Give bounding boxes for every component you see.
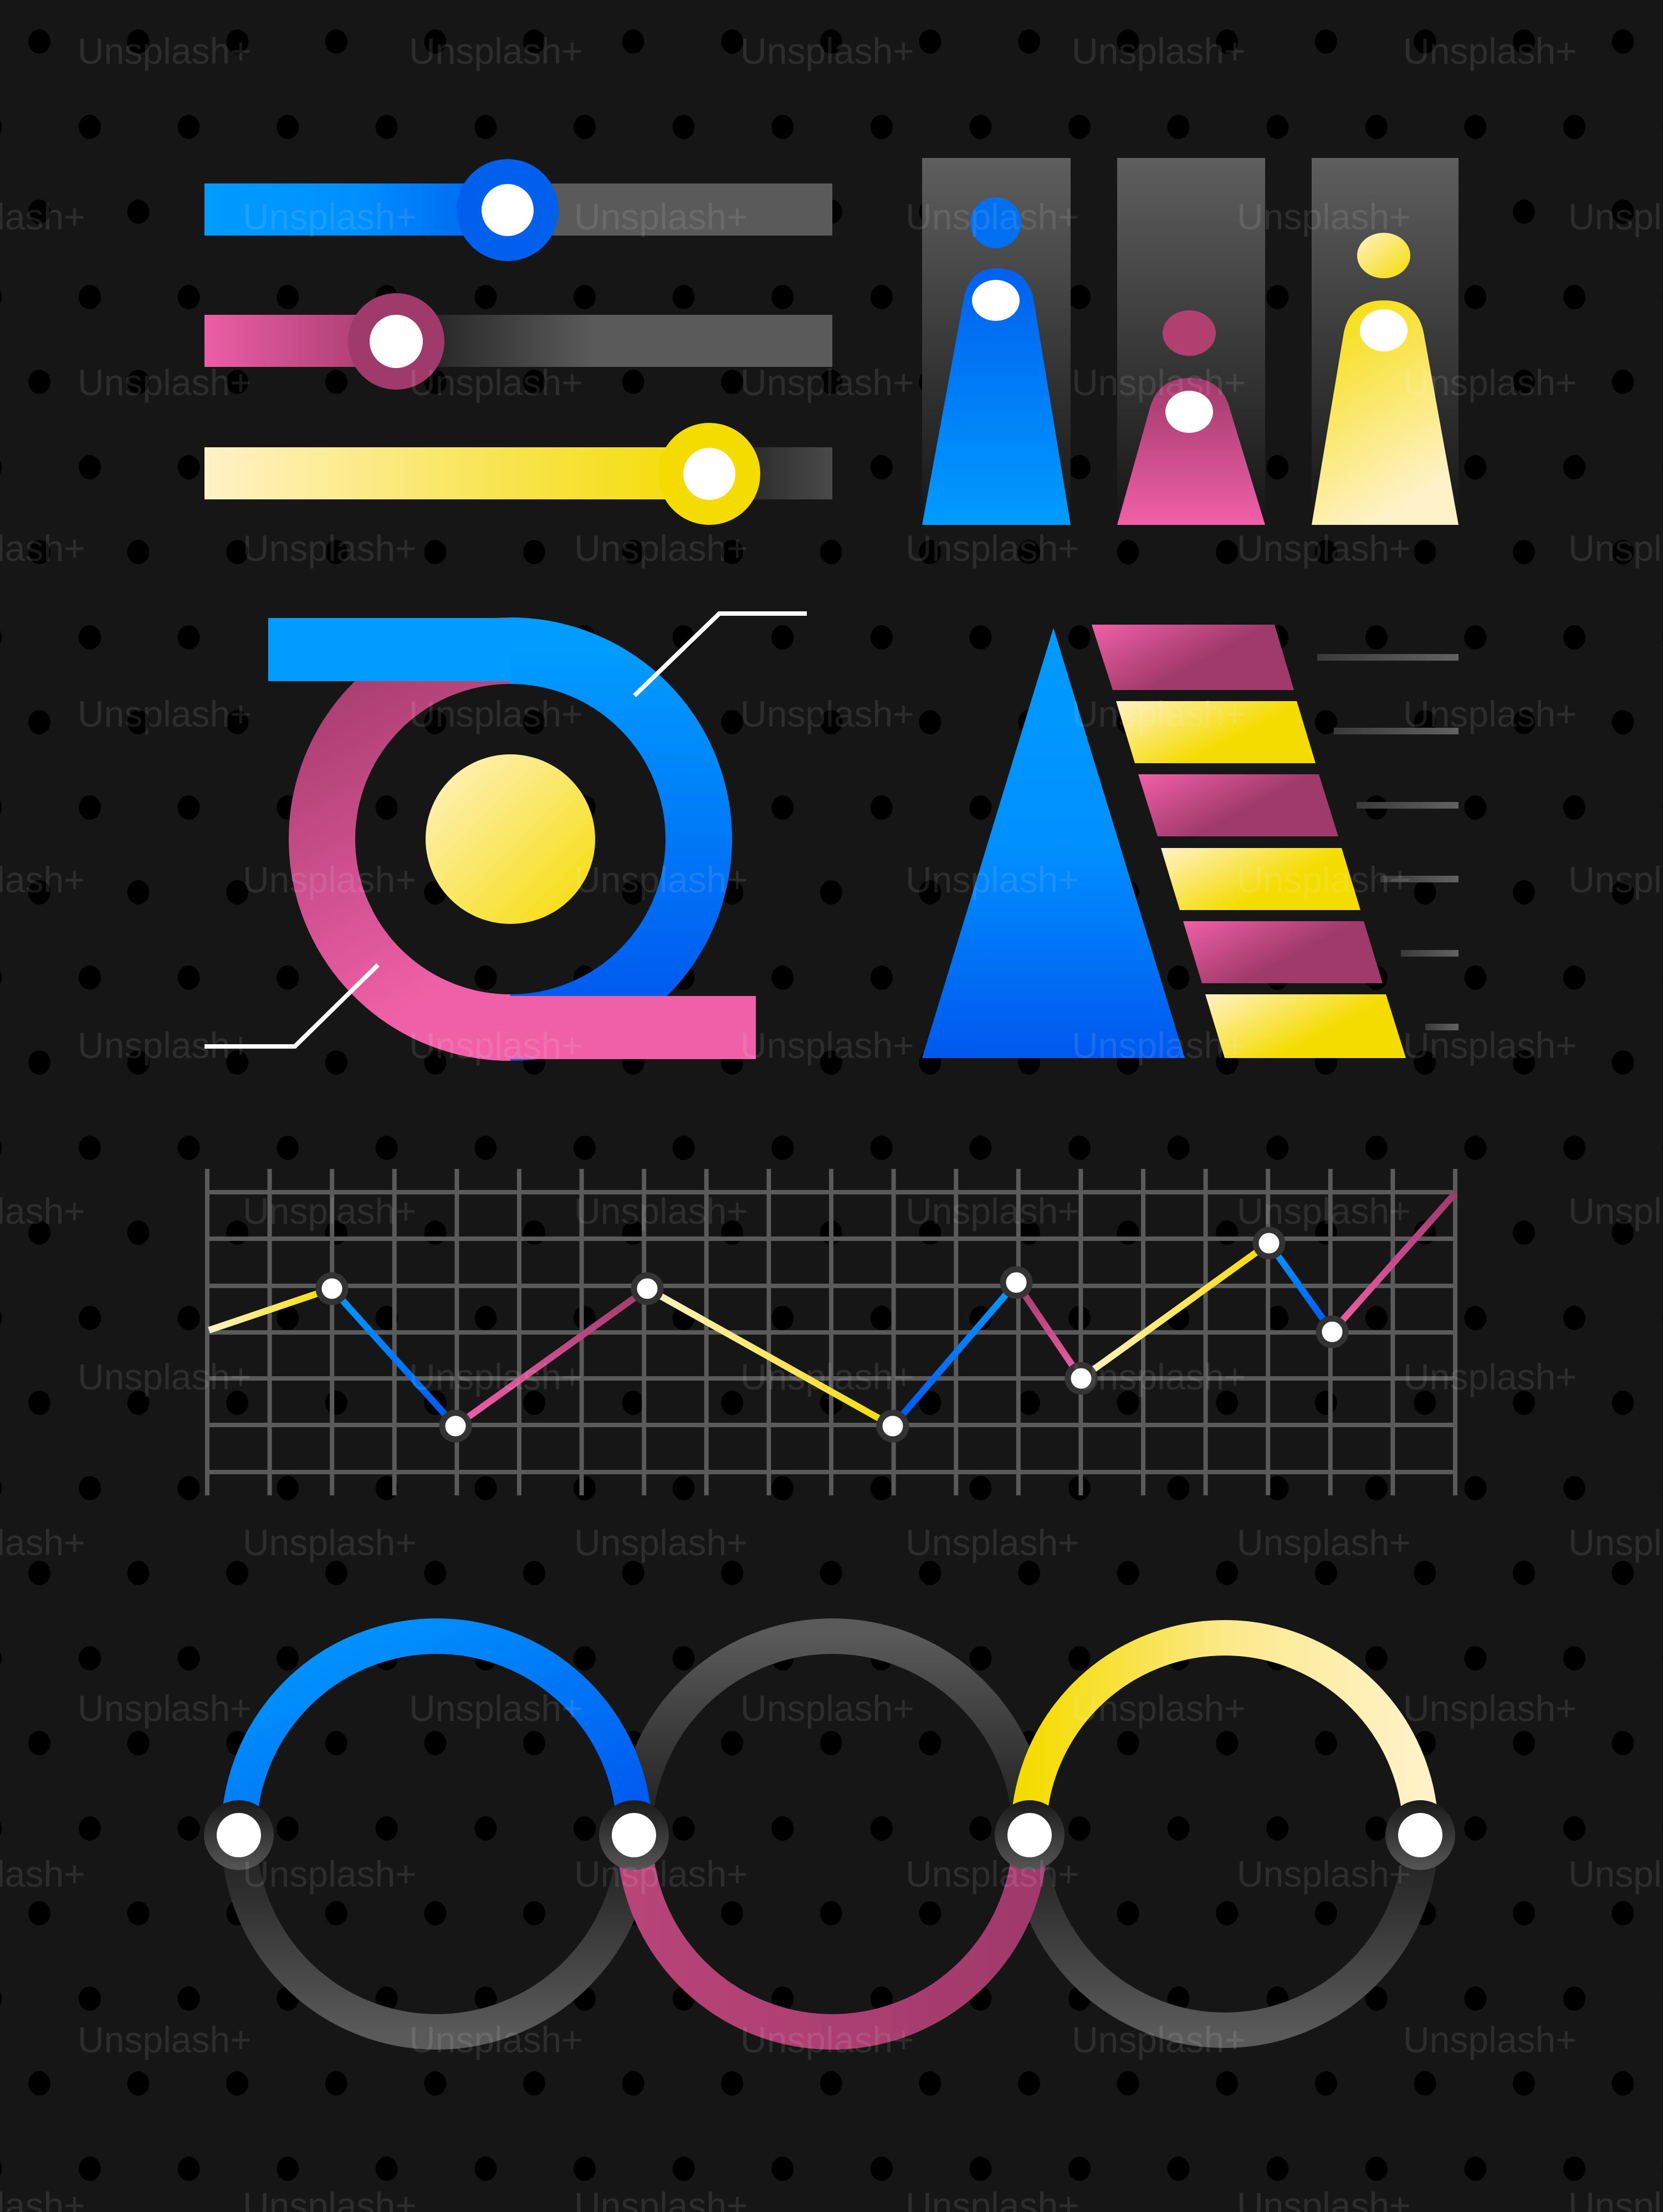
watermark text: Unsplash+ bbox=[905, 1191, 1079, 1232]
watermark text: Unsplash+ bbox=[574, 1522, 748, 1563]
column: blue figure bbox=[922, 158, 1071, 525]
watermark text: Unsplash+ bbox=[1072, 30, 1246, 71]
watermark text: Unsplash+ bbox=[905, 1522, 1079, 1563]
watermark text: Unsplash+ bbox=[740, 2019, 914, 2060]
watermark text: Unsplash+ bbox=[78, 1688, 252, 1729]
watermark text: Unsplash+ bbox=[1237, 1191, 1411, 1232]
watermark text: Unsplash+ bbox=[574, 859, 748, 900]
stripes bbox=[1092, 625, 1406, 1058]
watermark text: Unsplash+ bbox=[1237, 196, 1411, 237]
watermark text: Unsplash+ bbox=[1072, 1356, 1246, 1397]
watermark text: Unsplash+ bbox=[1072, 1688, 1246, 1729]
watermark text: Unsplash+ bbox=[574, 196, 748, 237]
watermark text: Unsplash+ bbox=[243, 1191, 417, 1232]
slider: yellow bbox=[204, 423, 832, 525]
watermark text: Unsplash+ bbox=[409, 2019, 583, 2060]
pedestal chart bbox=[922, 158, 1459, 525]
watermark text: Unsplash+ bbox=[1403, 693, 1577, 734]
watermark text: Unsplash+ bbox=[1237, 1522, 1411, 1563]
watermark text: Unsplash+ bbox=[78, 1356, 252, 1397]
watermark text: Unsplash+ bbox=[1403, 30, 1577, 71]
ring diagram bbox=[204, 614, 807, 1059]
watermark text: Unsplash+ bbox=[1072, 693, 1246, 734]
tick lines bbox=[1317, 654, 1459, 1030]
watermark text: Unsplash+ bbox=[740, 1025, 914, 1066]
column: pink figure bbox=[1117, 158, 1265, 525]
watermark text: Unsplash+ bbox=[1403, 1356, 1577, 1397]
watermark text: Unsplash+ bbox=[1237, 859, 1411, 900]
watermark text: Unsplash+ bbox=[1403, 362, 1577, 403]
yellow core bbox=[426, 754, 595, 924]
watermark text: Unsplash+ bbox=[243, 528, 417, 569]
watermark text: Unsplash+ bbox=[78, 693, 252, 734]
watermark text: Unsplash+ bbox=[905, 196, 1079, 237]
ring knobs bbox=[204, 1800, 1455, 1870]
watermark text: Unsplash+ bbox=[243, 196, 417, 237]
leader line: top right bbox=[635, 614, 807, 696]
linked rings bbox=[204, 1636, 1455, 2032]
pyramid with stair stripes bbox=[922, 625, 1459, 1058]
watermark text: Unsplash+ bbox=[78, 1025, 252, 1066]
slider: pink bbox=[204, 293, 832, 390]
watermark text: Unsplash+ bbox=[1403, 1688, 1577, 1729]
watermark text: Unsplash+ bbox=[78, 2019, 252, 2060]
watermark text: Unsplash+ bbox=[78, 362, 252, 403]
watermark text: Unsplash+ bbox=[1403, 1025, 1577, 1066]
data line segments bbox=[209, 1193, 1455, 1426]
watermark text: Unsplash+ bbox=[905, 859, 1079, 900]
watermark text: Unsplash+ bbox=[78, 30, 252, 71]
watermark text: Unsplash+ bbox=[574, 528, 748, 569]
watermark text: Unsplash+ bbox=[740, 693, 914, 734]
watermark text: Unsplash+ bbox=[409, 362, 583, 403]
watermark text: Unsplash+ bbox=[574, 1853, 748, 1894]
watermark text: Unsplash+ bbox=[1072, 2019, 1246, 2060]
watermark text: Unsplash+ bbox=[740, 1688, 914, 1729]
column: yellow figure bbox=[1312, 158, 1459, 525]
watermark text: Unsplash+ bbox=[243, 1522, 417, 1563]
watermark text: Unsplash+ bbox=[1237, 1853, 1411, 1894]
watermark text: Unsplash+ bbox=[574, 1191, 748, 1232]
watermark text: Unsplash+ bbox=[243, 859, 417, 900]
watermark text: Unsplash+ bbox=[243, 1853, 417, 1894]
watermark text: Unsplash+ bbox=[740, 1356, 914, 1397]
watermark text: Unsplash+ bbox=[409, 1688, 583, 1729]
watermark text: Unsplash+ bbox=[1403, 2019, 1577, 2060]
slider group bbox=[204, 159, 832, 525]
watermark text: Unsplash+ bbox=[409, 1025, 583, 1066]
watermark text: Unsplash+ bbox=[409, 1356, 583, 1397]
leader line: bottom left bbox=[204, 965, 378, 1046]
watermark text: Unsplash+ bbox=[409, 693, 583, 734]
data points bbox=[319, 1230, 1345, 1439]
slider: blue bbox=[204, 159, 832, 261]
watermark text: Unsplash+ bbox=[740, 30, 914, 71]
watermark text: Unsplash+ bbox=[905, 528, 1079, 569]
watermark text: Unsplash+ bbox=[1072, 1025, 1246, 1066]
line chart bbox=[207, 1169, 1455, 1495]
watermark text: Unsplash+ bbox=[1237, 528, 1411, 569]
watermark text: Unsplash+ bbox=[409, 30, 583, 71]
watermark text: Unsplash+ bbox=[905, 1853, 1079, 1894]
watermark text: Unsplash+ bbox=[1072, 362, 1246, 403]
triangle bbox=[922, 628, 1185, 1058]
watermark text: Unsplash+ bbox=[740, 362, 914, 403]
